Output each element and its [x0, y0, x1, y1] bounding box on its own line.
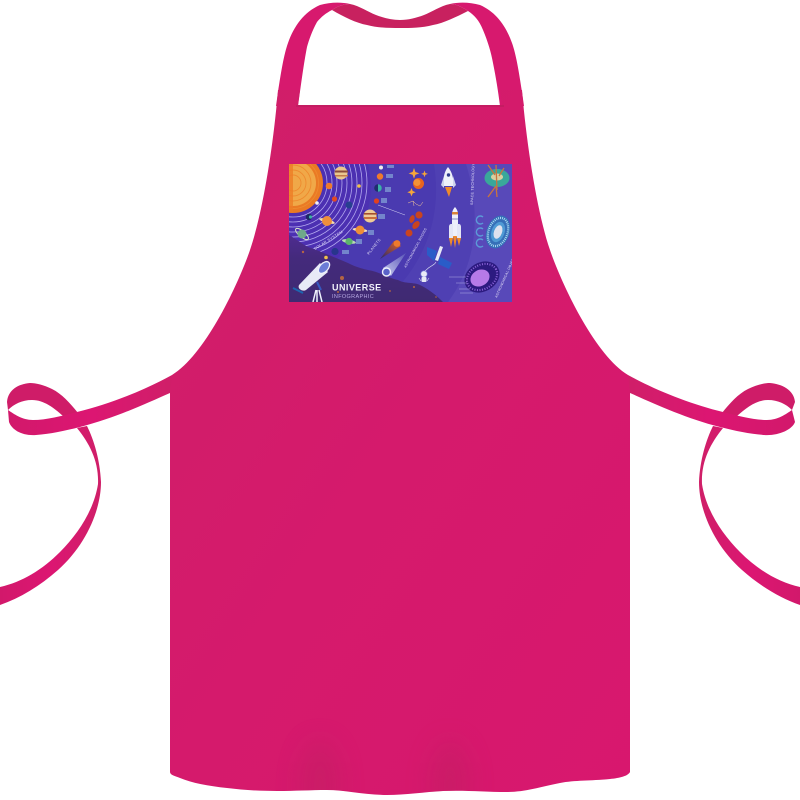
right tie front band: [624, 375, 795, 435]
satellite: [427, 246, 452, 269]
decorative stars: [302, 251, 437, 298]
subtitle: infographic: INFOGRAPHIC: [332, 294, 374, 300]
spiral galaxy: [486, 216, 510, 248]
universe infographic print: [289, 164, 512, 302]
section label: planets: PLANETS: [367, 238, 382, 256]
small info text blocks: [342, 165, 394, 254]
star and constellation: [407, 168, 428, 206]
solar system planets: [294, 166, 361, 241]
solar system orbits: [289, 164, 368, 252]
dark nebula hill: [289, 235, 443, 302]
left waist tie with bow: [0, 375, 176, 605]
outer band: astronomical objects: [448, 164, 512, 302]
band: astronomical bodies: [289, 164, 436, 302]
left side of neck strap: [276, 3, 350, 106]
black hole: [484, 165, 510, 197]
back band of neck strap: [332, 4, 468, 28]
band: space technology: [404, 164, 474, 302]
section label: space technology: SPACE TECHNOLOGY: [470, 163, 475, 205]
spiral galaxy icons: [476, 216, 483, 247]
sun: [289, 164, 323, 213]
right bow upper loop: [722, 383, 795, 416]
rocket one: [441, 167, 456, 197]
right side of neck strap: [450, 3, 524, 106]
right tie trailing tail: [699, 426, 800, 605]
astronaut: [419, 262, 436, 282]
purple nebula object: [449, 261, 500, 294]
rocket two: [449, 207, 461, 248]
telescope: [293, 259, 332, 302]
left tie trailing tail: [0, 426, 101, 605]
right waist tie with bow: [624, 375, 800, 605]
neck strap: [276, 3, 524, 106]
section label: astronomical bodies: ASTRONOMICAL BODIES: [403, 227, 428, 268]
leader line: [378, 205, 405, 215]
apron body: [160, 85, 640, 800]
planets column: [324, 166, 383, 259]
meteorites: [406, 211, 423, 236]
title: universe: UNIVERSE: [332, 282, 382, 292]
comet: [380, 240, 406, 276]
section label: astronomical objects: ASTRONOMICAL OBJECTS: [494, 253, 517, 298]
left bow upper loop: [7, 383, 78, 416]
section label: solar system: SOLAR SYSTEM: [313, 230, 344, 251]
band: planets: [289, 164, 370, 258]
left tie front band: [8, 375, 176, 435]
